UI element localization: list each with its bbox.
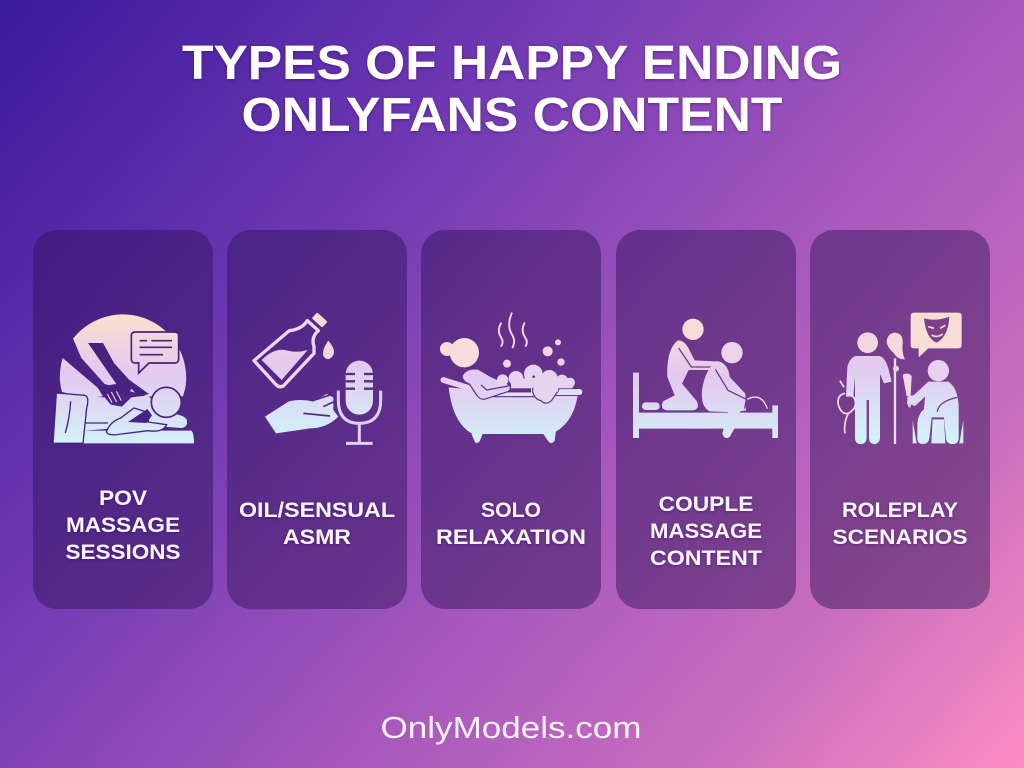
label: CONTENT [650, 547, 762, 570]
label: COUPLE [658, 493, 754, 516]
label: ASMR [283, 526, 351, 549]
label: POV [99, 487, 147, 510]
panel: POV massage sessions [33, 230, 213, 609]
panel: solo relaxation [421, 230, 601, 609]
icon: bathtub [440, 313, 579, 443]
icon: speech bubble [131, 332, 179, 373]
panel: oil/sensual ASMR [227, 230, 407, 609]
label [239, 499, 395, 549]
label [832, 499, 968, 549]
label: RELAXATION [436, 526, 586, 549]
label [436, 499, 586, 549]
label [650, 493, 762, 570]
label: SCENARIOS [832, 526, 968, 549]
title: TYPES OF HAPPY ENDING [182, 37, 842, 90]
label: MASSAGE [650, 520, 762, 543]
icon: mask speech bubble [911, 313, 962, 357]
label: OIL/SENSUAL [239, 499, 395, 522]
icon: roleplay figures and mask [838, 313, 963, 444]
panel: couple massage content [616, 230, 796, 609]
title [182, 37, 842, 142]
label: ROLEPLAY [842, 499, 958, 522]
icon: oil bottle, hand and microphone [254, 312, 381, 443]
panel: roleplay scenarios [810, 230, 990, 609]
label: SOLO [481, 499, 541, 522]
footer brand: OnlyModels.com [380, 710, 642, 745]
icon: couple on bed [633, 319, 778, 438]
label: SESSIONS [66, 541, 180, 564]
label [66, 487, 180, 564]
label: MASSAGE [66, 514, 180, 537]
icon: massage [53, 314, 194, 443]
title: ONLYFANS CONTENT [242, 89, 782, 142]
